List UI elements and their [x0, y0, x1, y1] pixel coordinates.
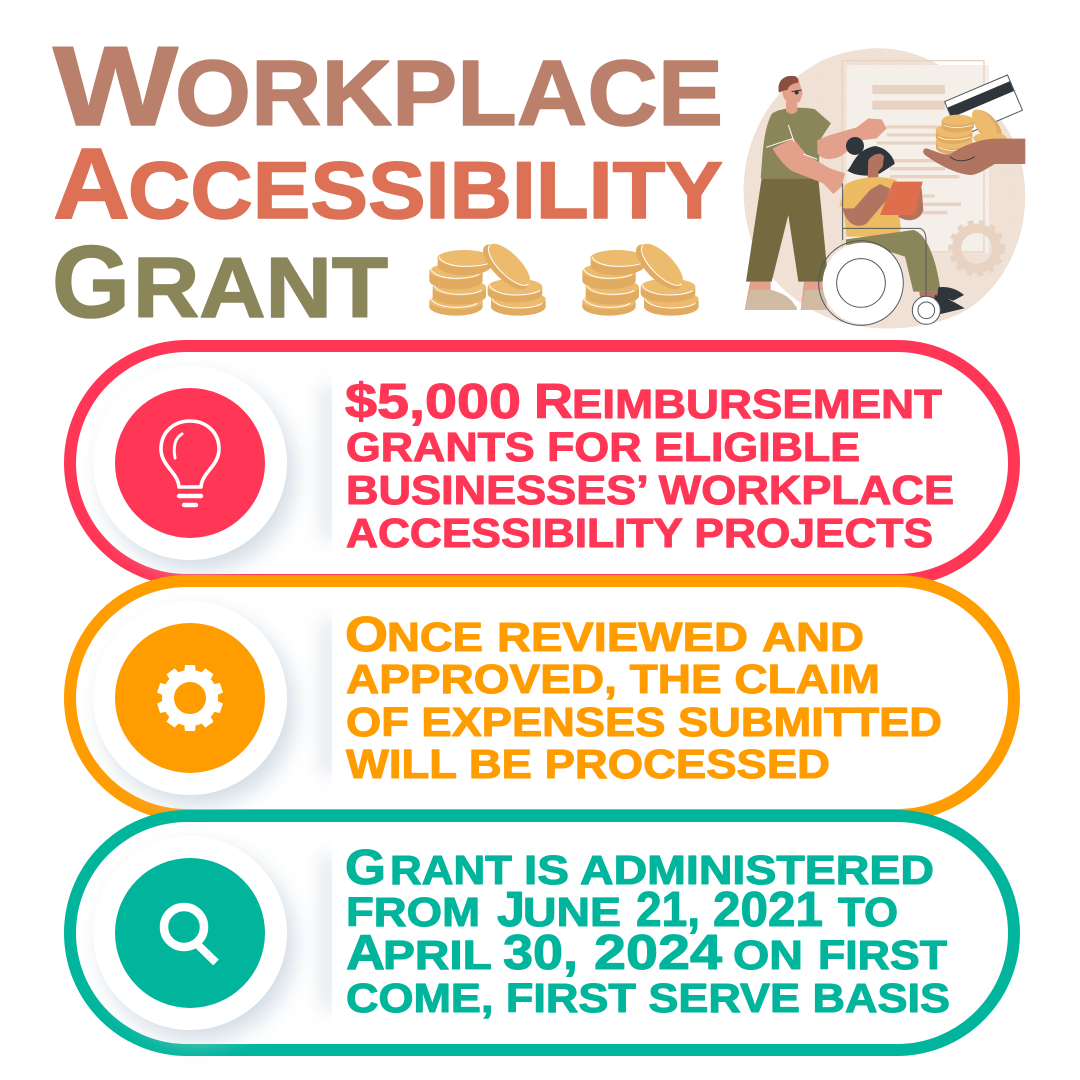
divider shadow: [322, 855, 334, 1010]
divider shadow: [322, 385, 334, 540]
title line: Accessibility: A: [53, 128, 130, 240]
man: [745, 76, 887, 310]
panel text: 2021: [713, 883, 823, 937]
panel text: [345, 375, 954, 556]
title: [52, 23, 723, 339]
icon: coin pile left: [429, 236, 546, 316]
panel text: O: [345, 608, 388, 662]
icon badge: light bulb: [93, 366, 295, 571]
background blob: [744, 48, 1025, 328]
panel: grant period: [70, 816, 1014, 1050]
panel text: NCE: [387, 614, 483, 660]
panel text: GRANTS FOR ELIGIBLE: [346, 424, 860, 470]
panel text: EIMBURSEMENT: [572, 381, 942, 427]
panel text: ADMINISTERED: [580, 847, 934, 893]
panel text: REVIEWED: [497, 614, 748, 660]
panel text: ACCESSIBILITY PROJECTS: [346, 510, 933, 556]
icon badge: gear: [93, 601, 295, 806]
icon: coin pile right: [582, 236, 699, 316]
title line: Grant: RANT: [133, 241, 388, 336]
panel text: A: [346, 926, 385, 980]
panel text: 2024: [594, 926, 722, 980]
icon badge: magnifier: [93, 836, 295, 1041]
panel text: R: [534, 375, 573, 429]
panel text: IS: [524, 847, 569, 893]
panel text: AND: [762, 614, 864, 660]
panel text: BUSINESSES’ WORKPLACE: [346, 467, 954, 513]
gear: [951, 222, 1003, 274]
panel text: APPROVED, THE CLAIM: [346, 656, 880, 702]
panel text: RANT: [390, 847, 512, 893]
illustration: people, wheelchair, document and grant money: [744, 48, 1025, 328]
panel text: COME, FIRST SERVE BASIS: [346, 975, 950, 1021]
panel text: [345, 841, 950, 1021]
title line: Grant: G: [52, 225, 130, 339]
panel: claim processing: [70, 581, 1014, 815]
panel text: G: [345, 841, 386, 895]
woman in wheelchair: [819, 137, 965, 325]
panel text: UNE: [523, 889, 621, 935]
panel text: WILL BE PROCESSED: [346, 741, 830, 787]
divider shadow: [322, 620, 334, 775]
panel text: PRIL: [383, 932, 491, 978]
panel text: [345, 608, 942, 787]
panel text: OF EXPENSES SUBMITTED: [346, 699, 942, 745]
title line: Workplace: W: [53, 23, 178, 149]
panel text: 21,: [636, 883, 700, 937]
hand with coins: [923, 105, 1025, 175]
panel text: $5,000: [345, 375, 521, 429]
panel text: FROM: [346, 889, 480, 935]
title line: Workplace: ORKPLACE: [175, 41, 723, 145]
title line: Accessibility: CCESSIBILITY: [128, 146, 723, 236]
panel text: 30,: [503, 926, 578, 980]
card: [945, 75, 1022, 137]
panel text: J: [497, 883, 525, 937]
panel text: TO: [838, 889, 898, 935]
document: [842, 61, 989, 253]
panel text: ON: [733, 932, 803, 978]
panel text: FIRST: [818, 932, 947, 978]
panel: reimbursement grants: [70, 346, 1014, 580]
